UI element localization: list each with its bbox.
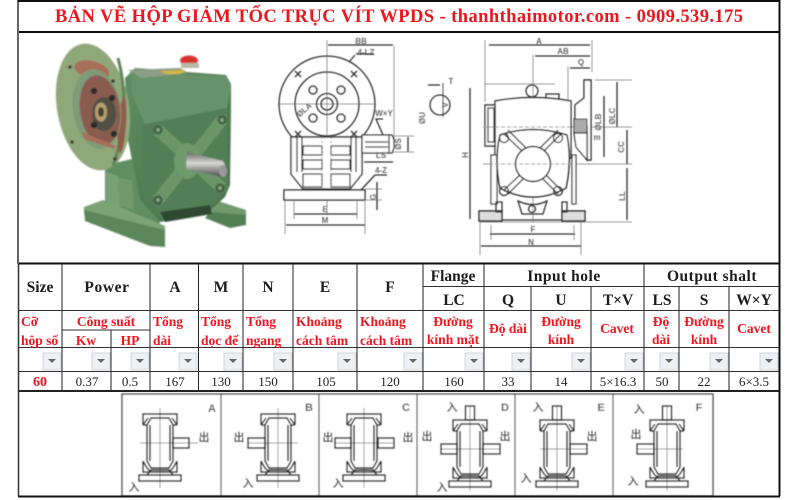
data row: 50 [656,374,668,389]
Vietnamese labels row: Tổng [201,314,231,329]
front view technical drawing: m [593,133,601,142]
table header row: LC [443,292,465,309]
Vietnamese labels row: Công suất [77,314,136,329]
mount A: A [208,403,216,415]
side view technical drawing: BB [355,37,367,46]
product photo: worm gearbox [46,38,246,247]
side view technical drawing: 4-LZ [358,48,375,57]
data row: 5×16.3 [600,374,636,389]
mount D [422,401,510,494]
mount A [128,403,216,494]
side view technical drawing: G [369,194,378,200]
Vietnamese labels row: Tổng [153,314,183,329]
data row: 120 [380,374,400,389]
Vietnamese labels row: Khoảng [360,314,406,329]
mount B: 入 [242,477,254,490]
table header row: S [700,292,708,309]
Vietnamese labels row [21,314,771,348]
Vietnamese labels row: Kw [76,333,96,348]
front view technical drawing: ØU [418,112,427,124]
front view technical drawing: T [449,77,454,86]
title: BẢN VẼ HỘP GIẢM TỐC TRỤC VÍT WPDS - thanhthaimotor.com - 0909.539.175 [55,5,743,27]
data row: 0.5 [122,374,138,389]
Vietnamese labels row: kính [548,332,575,347]
mount D: 入 [436,481,448,494]
table header row: U [555,292,567,309]
mount E: 入 [520,472,532,485]
mount B: B [305,402,313,414]
table header row: LS [653,292,671,309]
mount C: 入 [332,477,344,490]
Vietnamese labels row: dài [652,332,670,347]
Vietnamese labels row: Cavet [600,321,634,336]
table header row: E [320,279,330,296]
table header row: Size [27,279,53,296]
front view technical drawing: V [441,102,450,108]
front view technical drawing: CC [617,141,626,153]
mount B [234,402,313,490]
table header row: Output shalt [667,268,757,285]
data row: 22 [698,374,710,389]
table header row: M [214,279,229,296]
mount D: 入 [446,401,458,414]
Vietnamese labels row: Cỡ [21,314,39,329]
Vietnamese labels row: Đường [433,314,473,329]
table header row [27,268,772,309]
mount C: 出 [402,430,414,444]
table header row: W×Y [736,292,772,309]
table header row: N [262,279,274,296]
front view technical drawing: LL [618,191,627,201]
data row: 150 [258,374,278,389]
mount D: 出 [422,429,432,443]
front view technical drawing: ØLB [594,113,603,130]
mounting position diagrams [122,394,713,496]
mount C: 出 [322,430,334,444]
mount F: 入 [628,475,638,488]
front view technical drawing: Q [578,58,584,67]
side view technical drawing: E [322,205,328,214]
mount A: 出 [198,430,210,444]
table header row: Power [84,279,130,296]
Vietnamese labels row: Đường [541,314,581,329]
front view technical drawing: N [528,238,534,247]
table header row: T×V [603,292,634,309]
table header row: F [385,279,395,296]
data row: 130 [211,374,231,389]
data row: 167 [165,374,185,389]
mount A: 入 [128,481,140,494]
Vietnamese labels row: dọc đế [201,333,239,348]
side view technical drawing: W×Y [375,109,393,118]
filter dropdown buttons [43,353,778,370]
mount B: 出 [234,430,244,444]
front view technical drawing [418,37,632,255]
mount F [628,402,703,491]
side view technical drawing: ØLA [295,101,314,119]
side view technical drawing: M [322,216,329,225]
Vietnamese labels row: ngang [246,333,282,348]
Vietnamese labels row: kính [691,332,718,347]
Vietnamese labels row: hộp số [21,333,58,348]
Vietnamese labels row: Cavet [737,321,771,336]
side view technical drawing: 4-Z [375,166,387,175]
Vietnamese labels row: kính mặt [427,332,480,347]
Vietnamese labels row: Đường [684,314,724,329]
table header row: A [169,279,181,296]
mount F: F [696,402,703,414]
Vietnamese labels row: cách tâm [360,333,413,348]
data row: 60 [33,375,47,390]
Vietnamese labels row: Độ [653,314,669,329]
data row: 160 [444,374,464,389]
Vietnamese labels row: Khoảng [296,314,342,329]
front view technical drawing: ØLC [608,107,617,124]
data row: 105 [316,374,336,389]
mount F: 出 [630,427,642,441]
Vietnamese labels row: HP [121,333,139,348]
side view technical drawing: LS [376,151,387,160]
table header row: Input hole [527,268,601,285]
Vietnamese labels row: dài [153,333,171,348]
side view technical drawing: ØS [394,138,403,150]
front view technical drawing: A [536,37,542,46]
mount C [322,402,414,490]
data row: 0.37 [76,374,99,389]
mount F: 入 [634,403,644,416]
table header row: Flange [431,268,476,285]
table header row: Q [502,292,514,309]
mount E: 出 [586,429,598,443]
Vietnamese labels row: Tổng [246,314,276,329]
mount E [520,401,605,491]
mount D: D [501,402,509,414]
data row [33,374,769,390]
data row: 6×3.5 [739,374,769,389]
Vietnamese labels row: cách tâm [296,333,349,348]
data row: 14 [554,374,568,389]
mount D: 出 [500,429,510,443]
front view technical drawing: AB [557,47,569,56]
mount E: 入 [532,401,544,414]
data row: 33 [502,374,514,389]
dimension table [18,31,779,392]
Vietnamese labels row: Độ dài [489,321,527,336]
front view technical drawing: F [531,225,536,234]
side view technical drawing [278,37,414,234]
mount E: E [597,402,605,414]
front view technical drawing: H [461,152,470,158]
mount C: C [402,402,410,414]
